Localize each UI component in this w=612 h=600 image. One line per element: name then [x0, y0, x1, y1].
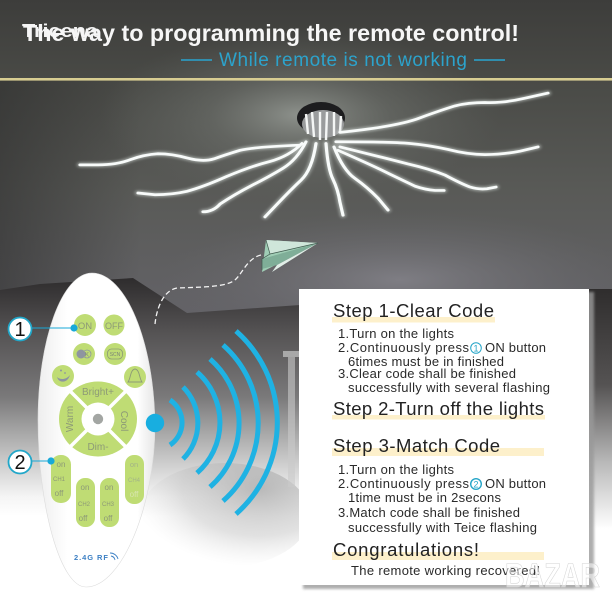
overlapping brand word: Tricena: [22, 21, 99, 41]
ceiling lamp with wavy arms: [80, 93, 548, 217]
button: scene: [104, 343, 126, 365]
text block: step 3 instructions: [338, 462, 546, 535]
button: K timer: K: [85, 352, 89, 358]
title: The way to programming the remote control!: [23, 20, 519, 46]
button: channel 1: CH1: [53, 477, 66, 483]
panel: programming steps: [299, 289, 594, 589]
button: moon: [52, 365, 74, 387]
background: ceiling photo: [0, 0, 612, 350]
direction pad: Dim-: [87, 442, 109, 453]
lamp base: [297, 102, 345, 140]
button: channel 4: on: [130, 460, 138, 469]
button: channel 3: CH3: [102, 502, 115, 508]
direction pad: Cool: [118, 411, 129, 431]
text block: step 3 instructions: 1.Turn on the lights: [338, 462, 454, 477]
button: channel 2: off: [79, 514, 88, 523]
text block: step 1 instructions: successfully with several flashing: [348, 380, 550, 395]
button: channel 1: [51, 455, 71, 503]
text block: closing note: The remote working recovered!: [351, 563, 540, 578]
button: OFF: [104, 314, 124, 336]
icon: signal waves: [146, 331, 277, 514]
background: room wall below the ceiling: [0, 278, 612, 600]
subtitle with side rules: While remote is not working: [219, 50, 467, 71]
callout: marker 1: [8, 318, 78, 341]
button: channel 3: [100, 478, 119, 527]
text block: step 1 instructions: 3.Clear code shall be finished: [338, 366, 516, 381]
remote body: [38, 273, 155, 587]
text block: step 1 instructions: 1: [473, 344, 479, 354]
remote control: [38, 273, 155, 587]
callout: marker 2: [8, 450, 55, 474]
icon: paper plane: [262, 240, 318, 272]
callout: marker 2: 2: [14, 452, 26, 474]
button: K timer: [73, 343, 95, 365]
callout: marker 1: 1: [14, 319, 26, 341]
text block: step 3 instructions: ON button: [485, 476, 546, 491]
button: channel 1: on: [57, 460, 65, 469]
button: channel 4: [125, 455, 144, 504]
button: channel 2: on: [81, 483, 89, 492]
text block: step 1 instructions: 1.Turn on the lights: [338, 326, 454, 341]
heading: congratulations: Congratulations!: [333, 539, 479, 560]
button: channel 2: [76, 478, 95, 527]
direction pad: Warm: [65, 406, 76, 432]
heading: step 3: Step 3-Match Code: [333, 435, 500, 456]
direction pad: [59, 382, 137, 456]
button: channel 2: CH2: [78, 502, 91, 508]
button: ON: [74, 314, 96, 336]
dashed flight path: [155, 255, 261, 324]
text block: step 1 instructions: ON button: [485, 340, 546, 355]
text block: step 3 instructions: 2: [473, 480, 479, 490]
button: bell: [124, 366, 146, 388]
text block: step 1 instructions: [338, 326, 550, 395]
arms core: [80, 93, 548, 217]
button: channel 1: off: [55, 489, 64, 498]
button: channel 3: on: [105, 483, 113, 492]
text block: step 1 instructions: 6times must be in finished: [348, 354, 504, 369]
button: channel 3: off: [104, 514, 113, 523]
heading: step 2: Step 2-Turn off the lights: [333, 398, 544, 419]
text block: step 3 instructions: 1time must be in 2secons: [348, 490, 502, 505]
button: scene: SCN: [110, 352, 121, 358]
text block: step 3 instructions: 3.Match code shall be finished: [338, 505, 520, 520]
heading: congratulations: [332, 539, 544, 560]
heading: step 1: Step 1-Clear Code: [333, 300, 494, 321]
remote label: 2.4G RF: 2.4G RF: [74, 553, 108, 562]
direction pad: Bright+: [82, 387, 114, 398]
button: channel 4: off: [130, 490, 139, 499]
text block: step 3 instructions: 2.Continuously press: [338, 476, 470, 491]
button: ON: ON: [78, 321, 92, 332]
text block: step 1 instructions: 2.Continuously press: [338, 340, 470, 355]
button: OFF: OFF: [105, 321, 123, 331]
button: channel 4: CH4: [128, 478, 141, 484]
arms glow: [80, 93, 548, 217]
text block: step 3 instructions: successfully with Teice flashing: [348, 520, 537, 535]
horizontal gold divider: [0, 78, 612, 81]
